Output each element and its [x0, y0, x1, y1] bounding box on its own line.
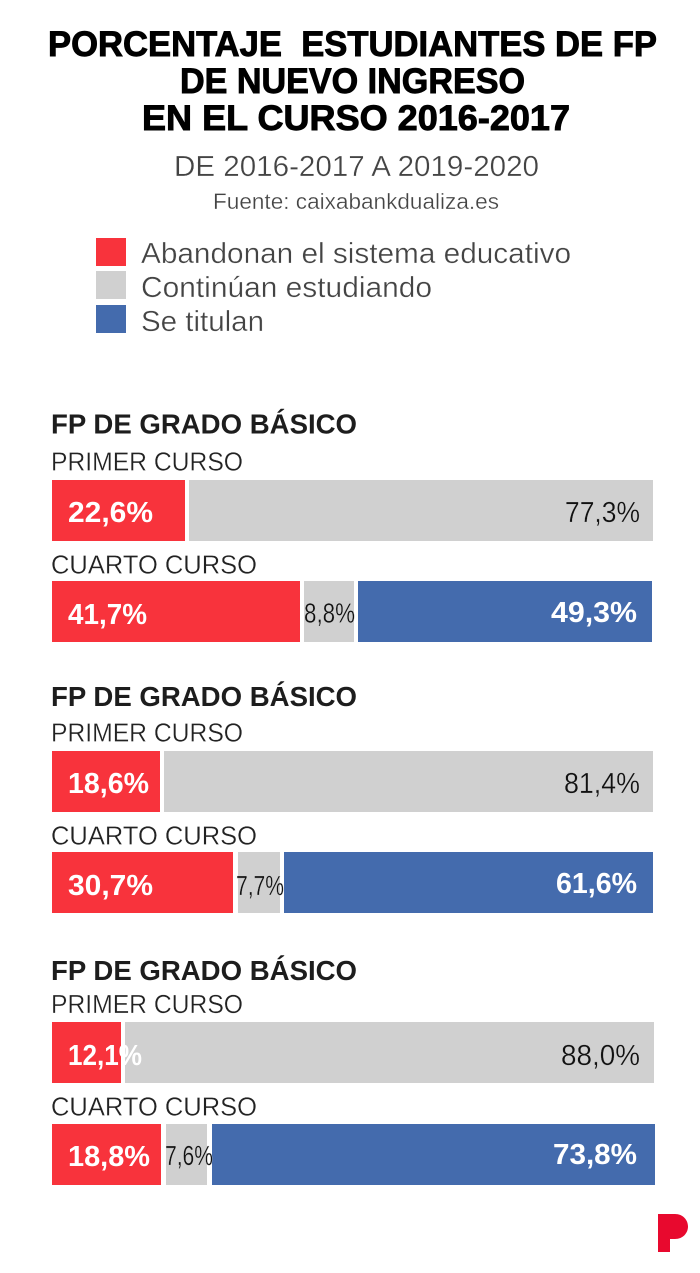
section 2 fourth year bar: 30,7% — [68, 870, 153, 902]
section 2 fourth year bar — [52, 852, 653, 913]
legend — [96, 238, 571, 338]
title — [48, 25, 657, 138]
section 2 heading: FP DE GRADO BÁSICO — [51, 681, 357, 712]
title: DE NUEVO INGRESO — [180, 62, 525, 101]
section 1 first year bar: 22,6% — [68, 497, 153, 529]
section 3 fourth year bar: 73,8% — [553, 1139, 637, 1171]
section 1 first year bar — [52, 480, 653, 541]
section 2 fourth year label: CUARTO CURSO — [51, 820, 257, 850]
section 2 first year label: PRIMER CURSO — [51, 718, 243, 748]
section 1 first year label: PRIMER CURSO — [51, 446, 243, 476]
section 2 first year bar — [52, 751, 653, 812]
section 1 fourth year bar — [52, 581, 652, 642]
section 3 fourth year bar — [52, 1124, 655, 1185]
section 3 fourth year bar: 7,6% — [165, 1140, 213, 1171]
section 1 heading: FP DE GRADO BÁSICO — [51, 408, 357, 440]
legend item: abandonan: Abandonan el sistema educativo — [141, 238, 571, 270]
section 2 fourth year bar: 7,7% — [236, 870, 284, 901]
title: EN EL CURSO 2016-2017 — [142, 99, 570, 138]
panel: section 3 — [51, 955, 655, 1185]
section 3 first year bar: 88,0% — [561, 1040, 640, 1072]
panel: section 2 — [51, 681, 653, 913]
section 3 fourth year label: CUARTO CURSO — [51, 1092, 257, 1122]
panel: section 1 — [51, 408, 653, 642]
legend item: se titulan: Se titulan — [141, 306, 264, 338]
icon: publisher logo — [658, 1214, 688, 1252]
section 1 fourth year label: CUARTO CURSO — [51, 550, 257, 580]
section 3 fourth year bar: 18,8% — [68, 1141, 150, 1173]
legend item: se titulan — [96, 305, 264, 338]
section 2 fourth year bar: 61,6% — [556, 868, 637, 900]
section 3 first year bar: 12,1% — [68, 1040, 142, 1072]
title: PORCENTAJE ESTUDIANTES DE FP — [48, 25, 657, 64]
section 3 heading: FP DE GRADO BÁSICO — [51, 955, 357, 986]
section 1 fourth year bar: 49,3% — [551, 597, 637, 629]
source: Fuente: caixabankdualiza.es — [213, 189, 499, 214]
section 1 fourth year bar: 8,8% — [304, 598, 355, 628]
subtitle: DE 2016-2017 A 2019-2020 — [174, 151, 539, 183]
section 3 first year bar — [52, 1022, 654, 1083]
section 2 first year bar: 81,4% — [564, 768, 640, 800]
section 2 first year bar: 18,6% — [68, 768, 149, 800]
section 1 first year bar: 77,3% — [565, 497, 640, 529]
section 1 fourth year bar: 41,7% — [68, 599, 147, 631]
legend item: continúan: Continúan estudiando — [141, 272, 432, 304]
section 3 first year label: PRIMER CURSO — [51, 989, 243, 1019]
